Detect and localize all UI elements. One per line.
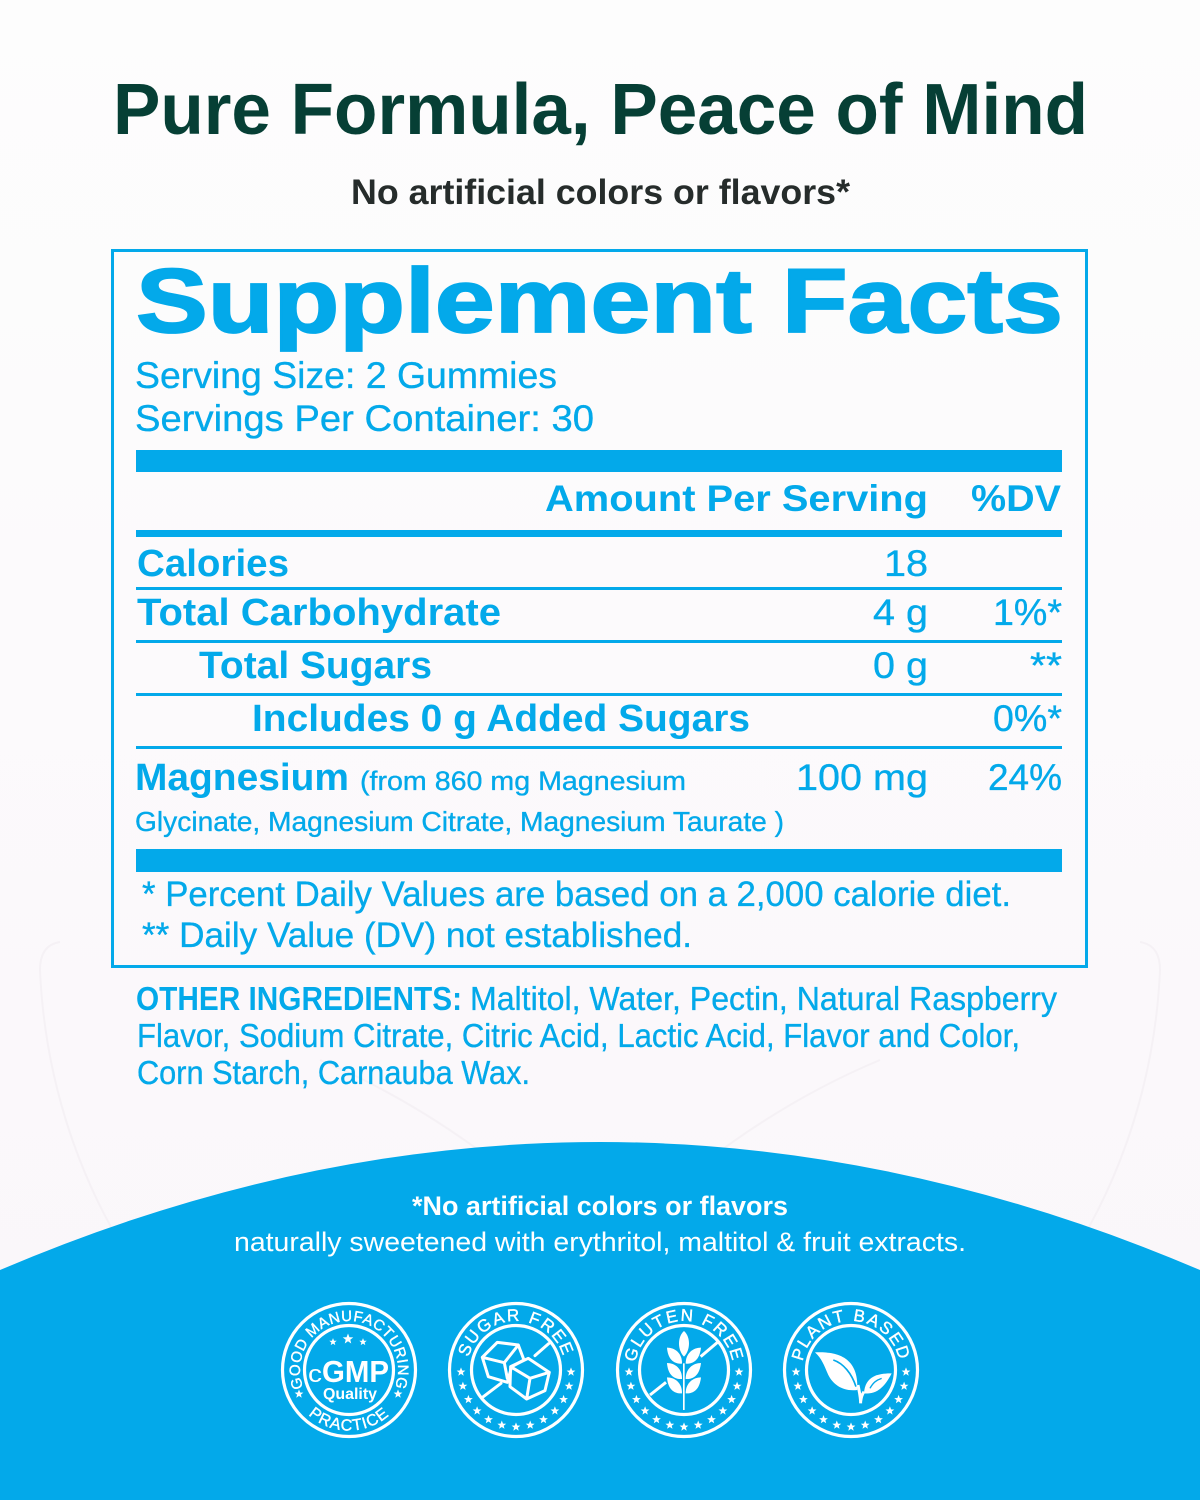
badge: cGMP: GMP [322,1354,389,1389]
badge: cGMP [280,1302,418,1438]
row: added sugars: 0%* [993,698,1062,739]
row: total carbohydrate [137,592,1062,634]
row: magnesium: 24% [988,757,1062,798]
row rule [136,693,1062,696]
footnote: daily value: ** Daily Value (DV) not established. [142,916,692,955]
other ingredients: Maltitol, Water, Pectin, Natural Raspberry [470,980,1057,1017]
row: magnesium: Magnesium [135,757,349,799]
panel heading: Supplement Facts [136,251,1063,352]
servings per container: Servings Per Container: 30 [135,398,594,439]
row: total carbohydrate: Total Carbohydrate [137,592,501,634]
badge: gluten free [616,1302,752,1438]
row: total sugars [199,645,1062,687]
footer note [234,1191,966,1257]
row: magnesium: 100 mg [796,757,928,798]
row: total sugars: Total Sugars [199,645,432,687]
badge: plant based [782,1302,920,1438]
row: calories: Calories [137,543,289,585]
footnote: percent daily values: * Percent Daily Values are based on a 2,000 calorie diet. [142,875,1011,914]
row: magnesium: (from 860 mg Magnesium [360,766,686,796]
row: total sugars: 0 g [873,645,928,686]
badge: cGMP: Quality [323,1386,377,1403]
bottom thick rule [136,849,1062,872]
title: Pure Formula, Peace of Mind [113,70,1088,150]
row: added sugars [252,698,1062,740]
header rule [136,530,1062,537]
row: magnesium [135,757,1062,837]
badge: sugar free [448,1302,584,1438]
blue curved footer [0,1142,1200,1500]
badge: cGMP: PRACTICE [308,1406,389,1431]
badge: sugar free: SUGAR FREE [458,1309,574,1356]
badge: plant based: PLANT BASED [791,1309,909,1360]
row: calories: 18 [884,543,928,584]
column header: amount per serving: Amount Per Serving [545,478,928,519]
other ingredients: Flavor, Sodium Citrate, Citric Acid, Lactic Acid, Flavor and Color, [137,1017,1020,1054]
row rule [136,640,1062,643]
badge: cGMP: c [308,1361,322,1388]
row rule [136,746,1062,749]
faint lotus watermark [40,942,1160,1436]
panel: supplement facts [112,250,1086,966]
badge: cGMP: GOOD MANUFACTURING [289,1310,409,1389]
row: magnesium: Glycinate, Magnesium Citrate, Magnesium Taurate ) [135,806,784,837]
row: total sugars: ** [1030,645,1062,686]
footer note: naturally sweetened with erythritol, maltitol & fruit extracts. [234,1227,966,1257]
row: total carbohydrate: 1%* [993,592,1062,633]
other ingredients: OTHER INGREDIENTS: [136,980,462,1017]
footer note: *No artificial colors or flavors [412,1191,788,1221]
row: added sugars: Includes 0 g Added Sugars [252,698,750,740]
row: total carbohydrate: 4 g [873,592,928,633]
serving size: Serving Size: 2 Gummies [135,355,557,396]
other ingredients: Corn Starch, Carnauba Wax. [137,1054,530,1091]
badge: gluten free: GLUTEN FREE [625,1308,744,1360]
other ingredients [136,980,1057,1091]
panel border [112,250,1086,966]
top thick rule [136,450,1062,472]
row rule [136,587,1062,590]
column header: percent daily value: %DV [971,478,1061,519]
subtitle: No artificial colors or flavors* [351,173,850,212]
row: calories [137,543,928,585]
